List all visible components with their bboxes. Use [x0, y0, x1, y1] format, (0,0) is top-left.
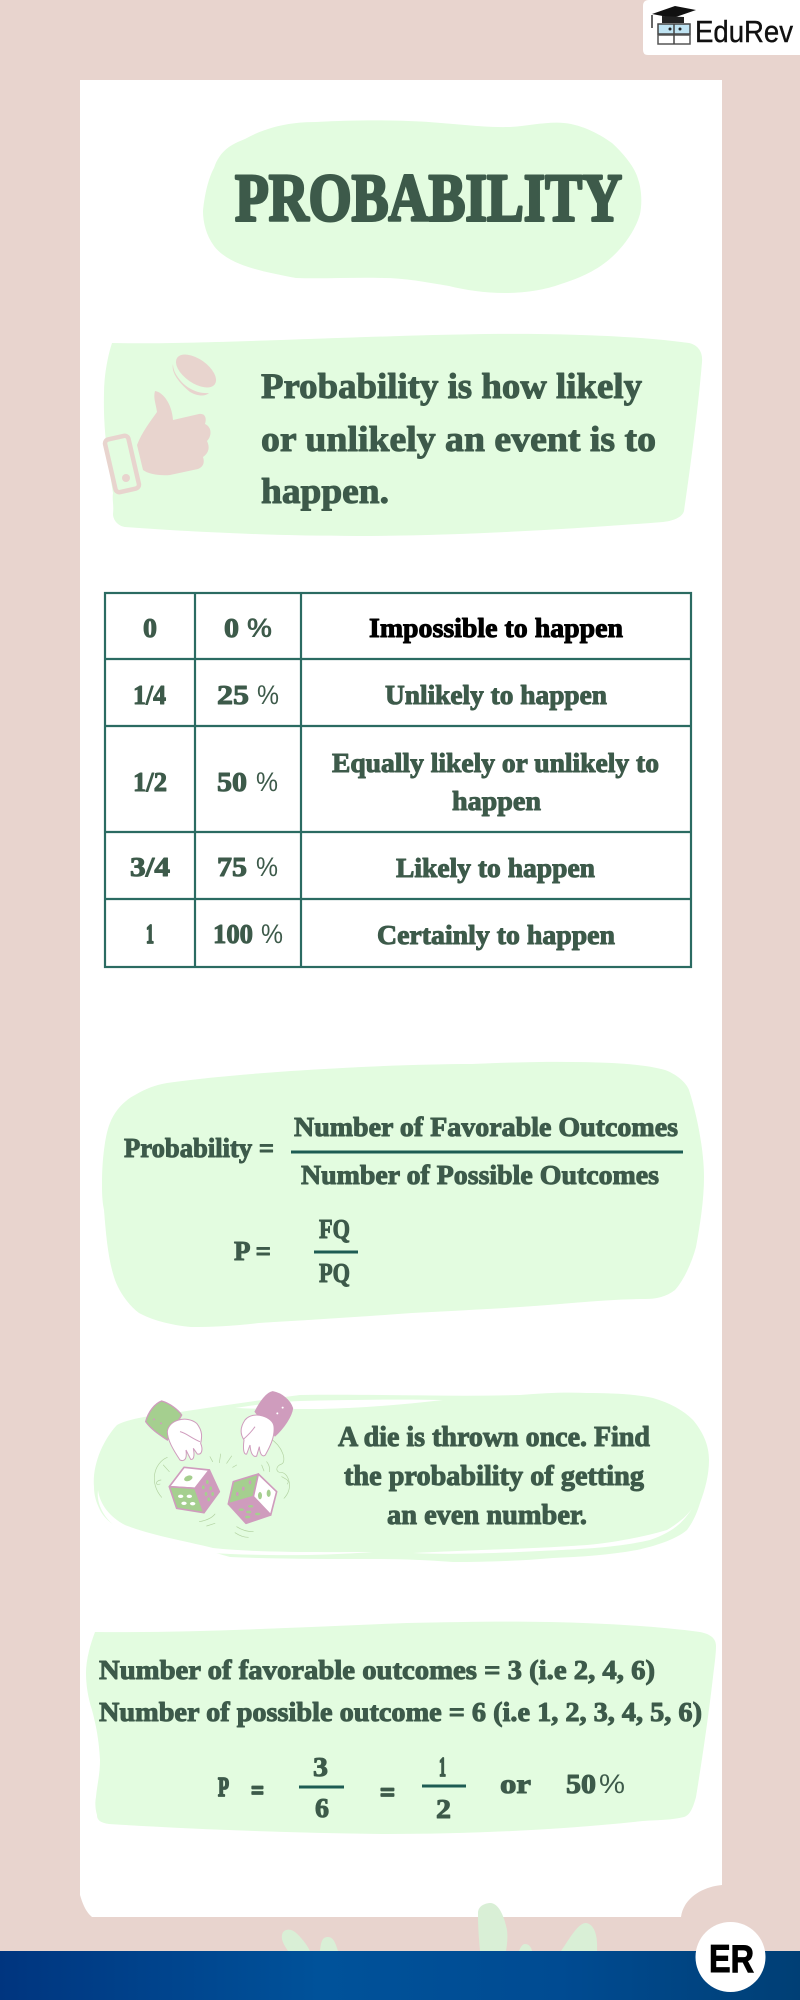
badge: ER: ER: [709, 1938, 754, 1981]
row: unlikely: 1/4: [133, 680, 166, 710]
panel: die question: [94, 1392, 709, 1562]
right die: [228, 1474, 277, 1523]
logo: EduRev: [643, 0, 800, 55]
row: likely: Likely to happen: [396, 853, 595, 883]
row: equally likely: [133, 748, 659, 816]
icon: hands rolling dice: [146, 1392, 293, 1537]
row: impossible: 0: [143, 613, 157, 643]
row: certain: Certainly to happen: [377, 920, 615, 950]
left sleeve: [146, 1401, 182, 1440]
solution calculation: 3: [313, 1752, 328, 1782]
solution calculation: 2: [436, 1794, 451, 1824]
solution calculation: [218, 1752, 625, 1824]
question text: an even number.: [387, 1500, 587, 1531]
title text: PROBABILITY: [235, 160, 622, 236]
row: equally likely: 1/2: [133, 767, 167, 797]
right hand: [241, 1415, 274, 1456]
solution calculation: 50: [566, 1769, 596, 1799]
solution counts: [99, 1655, 702, 1727]
footer bar: [0, 1951, 800, 2000]
definition text: or unlikely an event is to: [261, 419, 656, 459]
formula: word form: Number of Possible Outcomes: [301, 1160, 659, 1190]
white content panel: [80, 80, 722, 1917]
row: likely: %: [256, 852, 278, 882]
definition text: happen.: [261, 471, 389, 511]
definition text: Probability is how likely: [261, 366, 642, 406]
left hand: [167, 1419, 202, 1461]
solution calculation: 1: [439, 1752, 446, 1782]
row: impossible: Impossible to happen: [369, 613, 623, 643]
right sleeve: [255, 1392, 293, 1436]
row: equally likely: Equally likely or unlikely to: [332, 748, 659, 778]
row: equally likely: %: [256, 767, 278, 797]
solution calculation: or: [500, 1769, 531, 1799]
table: probability scale: [105, 593, 691, 967]
definition text: [261, 366, 656, 511]
row: unlikely: %: [257, 680, 279, 710]
formula: symbol form: FQ: [319, 1214, 350, 1244]
formula: word form: Number of Favorable Outcomes: [294, 1112, 678, 1142]
badge: ER: [696, 1922, 766, 1992]
left die: [169, 1467, 219, 1513]
decorative plants: [282, 1903, 597, 1951]
row: impossible: %: [247, 613, 272, 643]
panel: title: [203, 120, 641, 293]
row: certain: 100: [213, 919, 253, 949]
row: certain: %: [261, 919, 283, 949]
brush strokes: [98, 1400, 693, 1555]
row: certain: [146, 919, 615, 950]
row: unlikely: Unlikely to happen: [385, 680, 607, 710]
solution calculation: %: [599, 1769, 625, 1799]
row: likely: 75: [217, 852, 247, 882]
row: equally likely: happen: [452, 786, 541, 816]
panel: formula: [102, 1062, 704, 1327]
panel: definition: [104, 334, 702, 536]
question text: the probability of getting: [344, 1461, 644, 1492]
solution counts: Number of possible outcome = 6 (i.e 1, 2, 3, 4, 5, 6): [99, 1697, 702, 1727]
formula: symbol form: [234, 1214, 358, 1288]
row: likely: 3/4: [130, 852, 170, 882]
formula: word form: [124, 1112, 683, 1190]
question text: [338, 1422, 650, 1531]
formula: symbol form: PQ: [319, 1258, 350, 1288]
solution calculation: =: [251, 1775, 264, 1805]
row: unlikely: [133, 680, 607, 710]
row: certain: 1: [146, 919, 154, 949]
solution calculation: =: [380, 1777, 395, 1807]
solution calculation: 6: [315, 1793, 329, 1823]
row: impossible: 0: [224, 613, 239, 643]
row: equally likely: 50: [217, 767, 247, 797]
icon: thumb flipping coin: [104, 348, 222, 493]
row: likely: [130, 852, 595, 883]
question text: A die is thrown once. Find: [338, 1422, 650, 1453]
panel: solution: [86, 1622, 716, 1834]
solution calculation: P: [218, 1772, 229, 1802]
row: impossible: [143, 613, 623, 643]
row: unlikely: 25: [217, 680, 249, 710]
formula: symbol form: P =: [234, 1236, 271, 1266]
formula: word form: Probability =: [124, 1133, 274, 1163]
solution counts: Number of favorable outcomes = 3 (i.e 2, 4, 6): [99, 1655, 655, 1685]
